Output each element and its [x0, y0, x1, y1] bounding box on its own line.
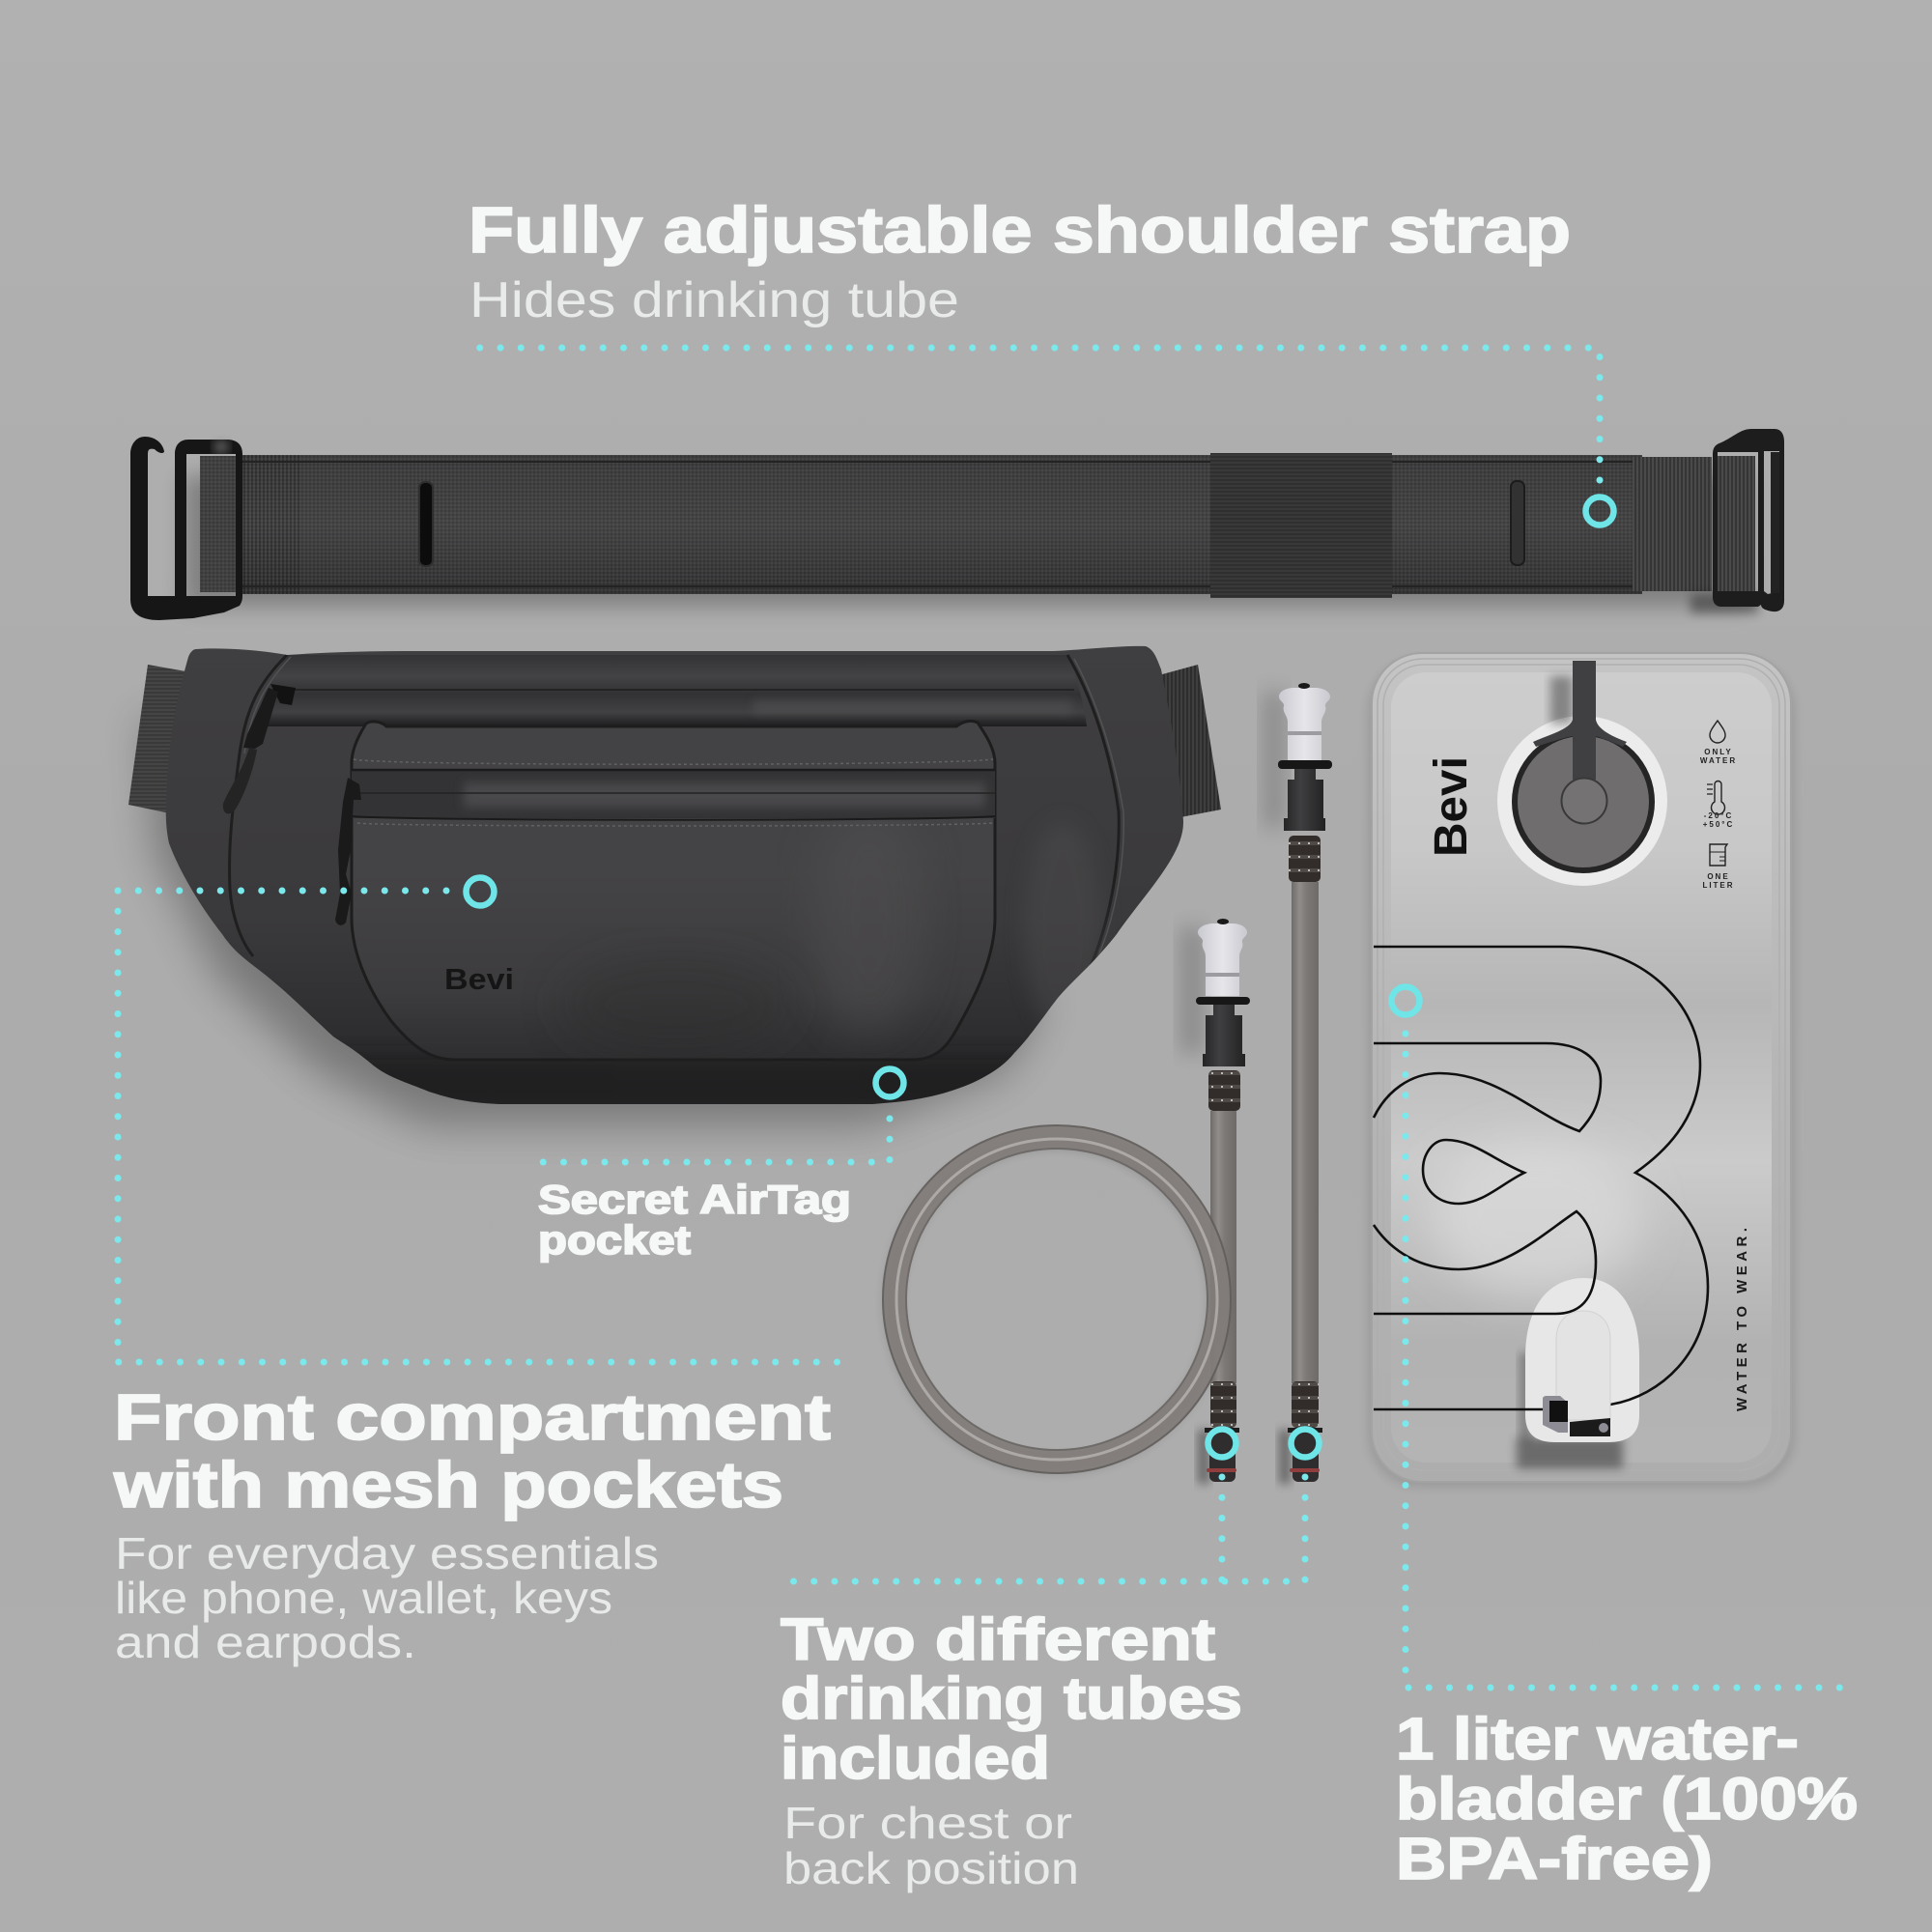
bite valve — [1198, 923, 1247, 996]
strap slot left — [419, 482, 433, 566]
heading: front compartment: like phone, wallet, keys — [115, 1573, 612, 1623]
tube end — [1288, 1428, 1322, 1433]
heading: shoulder strap: Fully adjustable shoulder strap — [469, 194, 1571, 267]
heading: water bladder: BPA-free) — [1396, 1826, 1713, 1891]
heading: drinking tubes — [781, 1606, 1242, 1893]
coiled drinking tube — [883, 1125, 1231, 1473]
body highlight right — [1033, 840, 1103, 1014]
heading: drinking tubes: drinking tubes — [781, 1665, 1242, 1731]
hose clip front — [1543, 1311, 1610, 1436]
strap webbing — [242, 455, 1642, 594]
strap keeper band — [1210, 453, 1392, 598]
heading: water bladder — [1396, 1706, 1858, 1891]
bag logo: Bevi — [444, 962, 514, 996]
shoulder strap — [130, 429, 1784, 620]
heading: drinking tubes: back position — [783, 1843, 1079, 1893]
icon: temperature range: -20°C — [1704, 811, 1733, 820]
pocket highlight — [838, 920, 896, 1015]
top zipper pull — [223, 684, 296, 813]
pocket stitching — [354, 759, 993, 826]
callout line: water bladder — [1391, 987, 1840, 1688]
callout line: drinking tubes — [781, 1430, 1320, 1581]
icon: temperature range: +50°C — [1703, 820, 1734, 829]
bladder logo: Bevi — [1426, 756, 1477, 857]
icon: one liter — [1702, 844, 1735, 890]
left buckle — [130, 437, 242, 620]
side seams — [229, 655, 1119, 985]
bite valve — [1279, 688, 1330, 760]
icon: temperature range — [1703, 781, 1734, 829]
right buckle — [1690, 429, 1784, 613]
long drinking tube — [1264, 683, 1332, 1484]
icon: one liter: LITER — [1702, 881, 1735, 890]
heading: front compartment: with mesh pockets — [113, 1449, 783, 1521]
icon: one liter: ONE — [1707, 872, 1730, 881]
connector — [1284, 769, 1325, 831]
heading: airtag pocket — [538, 1177, 851, 1263]
bag shadow — [145, 715, 1043, 1125]
heading: front compartment: Front compartment — [114, 1381, 831, 1454]
bottom shade — [361, 1056, 1012, 1104]
heading: shoulder strap — [469, 194, 1571, 328]
strap slot right — [1511, 481, 1524, 565]
heading: drinking tubes: Two different — [781, 1606, 1215, 1672]
heading: front compartment — [113, 1381, 831, 1667]
top zipper band — [253, 655, 1087, 726]
connector — [1203, 1005, 1245, 1066]
waist bag — [128, 646, 1221, 1125]
infographic canvas — [112, 205, 1857, 1893]
hose clip base — [1517, 1278, 1639, 1468]
heading: airtag pocket: Secret AirTag — [538, 1177, 851, 1222]
tube shaft — [1210, 1111, 1236, 1383]
heading: airtag pocket: pocket — [538, 1217, 691, 1263]
tube end — [1205, 1428, 1239, 1433]
bladder slogan: WATER TO WEAR. — [1734, 1228, 1750, 1411]
callout line: front compartment — [118, 877, 840, 1362]
bag body — [166, 646, 1183, 1104]
tube shaft — [1292, 882, 1319, 1383]
pocket zipper band — [348, 770, 1005, 820]
heading: drinking tubes: included — [781, 1725, 1050, 1791]
icon: only water: WATER — [1700, 756, 1737, 765]
heading: front compartment: and earpods. — [115, 1617, 416, 1667]
heading: drinking tubes: For chest or — [783, 1798, 1072, 1848]
bladder soft glow — [1430, 1140, 1642, 1294]
filler cap — [1497, 661, 1667, 886]
water bladder — [1368, 653, 1795, 1488]
elastic waist strap left — [128, 665, 191, 813]
elastic section right — [1633, 457, 1712, 591]
heading: shoulder strap: Hides drinking tube — [469, 272, 959, 328]
bladder ampersand line art — [1374, 947, 1708, 1409]
icon: only water: ONLY — [1704, 748, 1733, 756]
front pocket — [348, 721, 1005, 1060]
elastic waist strap right — [1155, 665, 1221, 817]
icon: only water — [1700, 721, 1737, 765]
callout line: strap — [468, 348, 1613, 526]
heading: front compartment: For everyday essentials — [115, 1528, 659, 1578]
pocket dark crease — [560, 956, 792, 1053]
callout line: airtag pocket — [534, 1068, 904, 1162]
pocket zipper pull — [335, 778, 361, 925]
bladder body — [1368, 653, 1795, 1488]
heading: water bladder: 1 liter water- — [1396, 1706, 1799, 1772]
heading: water bladder: bladder (100% — [1396, 1766, 1858, 1832]
short drinking tube — [1180, 919, 1250, 1484]
